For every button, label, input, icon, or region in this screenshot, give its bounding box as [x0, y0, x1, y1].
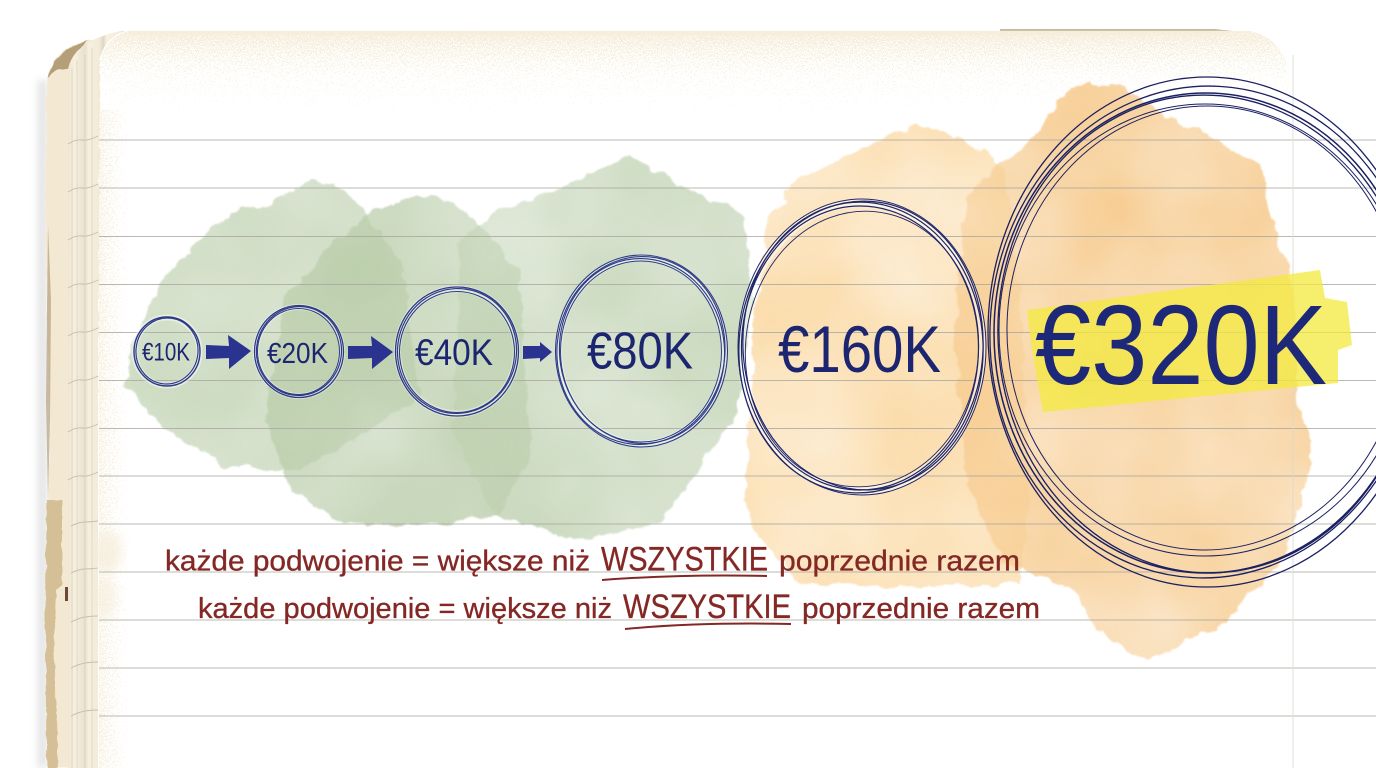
circle: €20K [251, 301, 347, 401]
caption line 2: poprzednie razem [802, 593, 1040, 625]
circle: €320K [977, 75, 1376, 589]
arrow: €40K to €80K [523, 342, 552, 362]
label: €160K: €160K [778, 312, 941, 386]
caption line 2: każde podwojenie = większe niż [198, 593, 612, 625]
circle: €10K [132, 314, 202, 388]
label: €320K: €320K [1035, 282, 1327, 408]
yellow highlighter behind the final value [1027, 270, 1352, 412]
circle: €40K [389, 281, 525, 421]
label: €40K: €40K [415, 332, 493, 373]
arrow: €20K to €40K [348, 336, 393, 369]
caption line 1: WSZYSTKIE [601, 540, 768, 578]
watercolor wash: orange [745, 82, 1312, 660]
caption line 1 [165, 540, 1020, 580]
label: €10K: €10K [142, 338, 190, 366]
circle: €160K [729, 193, 993, 501]
caption line 1: poprzednie razem [779, 546, 1020, 578]
notebook spine and stacked page edges [38, 31, 125, 768]
caption line 2 [198, 588, 1040, 629]
caption line 2: WSZYSTKIE [623, 588, 791, 626]
arrow: €10K to €20K [206, 335, 251, 369]
label: €20K: €20K [267, 338, 329, 370]
label: €80K: €80K [587, 322, 693, 380]
caption line 1: każde podwojenie = większe niż [165, 546, 590, 578]
watercolor wash: green [125, 155, 752, 540]
circle: €80K [549, 250, 733, 451]
